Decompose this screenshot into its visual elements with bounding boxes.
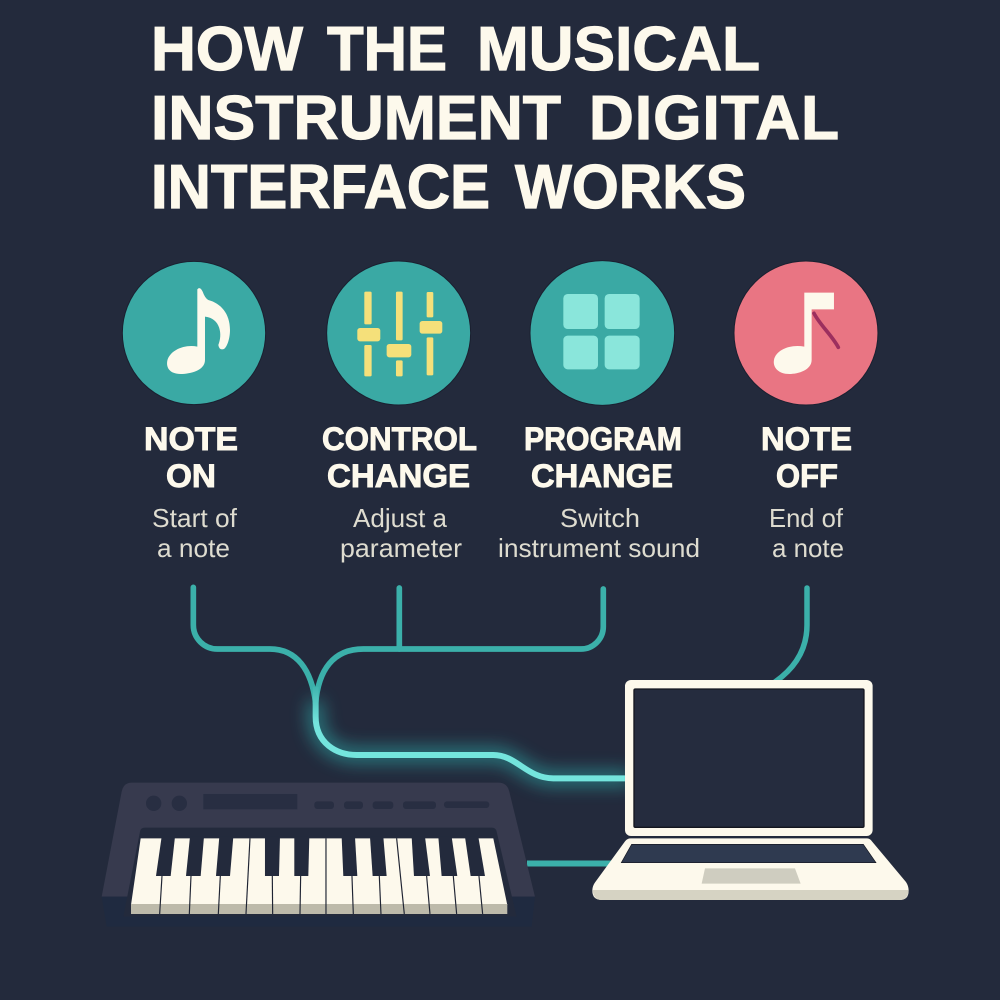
label: program change [498,421,700,563]
icon: program change grid [530,261,675,405]
white keys [131,838,507,905]
title: INSTRUMENT [151,84,561,153]
label: control change: Adjust a [353,503,448,533]
title: INTERFACE [151,153,490,222]
label: control change: CHANGE [327,458,470,494]
label: program change: Switch [560,503,640,533]
label: note on [144,421,238,563]
laptop [592,680,909,900]
label: note off: a note [772,533,844,563]
icon: note on [122,261,266,405]
cable: keyboard to laptop [527,860,612,866]
laptop screen [625,680,873,836]
keyboard body [102,783,535,897]
label: program change: PROGRAM [524,421,682,457]
black keys [156,837,485,876]
label: note off: NOTE [761,421,852,457]
icon: note off [734,261,878,405]
key dividers [160,838,483,914]
control panel [146,794,489,811]
title: MUSICAL [477,15,760,84]
key well [123,828,517,917]
laptop keyboard [621,844,876,863]
trackpad [702,868,801,884]
label: note off [761,421,852,563]
connector cables [193,587,625,778]
label: note off: End of [769,503,844,533]
label: program change: CHANGE [531,458,673,494]
title: WORKS [515,153,746,222]
label: note on: NOTE [144,421,238,457]
label: control change: parameter [340,533,462,563]
keyboard base shadow [102,897,535,927]
label: control change [322,421,477,563]
title [151,15,839,222]
label: note on: Start of [152,503,238,533]
cable: note off to laptop [775,588,807,682]
label: control change: CONTROL [322,421,477,457]
title: HOW [151,15,303,84]
base front edge [593,890,909,900]
title: THE [327,15,447,84]
label: program change: instrument sound [498,533,700,563]
title: DIGITAL [589,84,839,153]
label: note on: ON [166,458,216,494]
laptop base [592,838,909,900]
screen display [634,689,864,827]
keyboard [102,783,535,927]
white key fronts [131,904,507,914]
icon: control change sliders [327,261,471,405]
label: note on: a note [157,533,230,563]
label: note off: OFF [776,458,838,494]
